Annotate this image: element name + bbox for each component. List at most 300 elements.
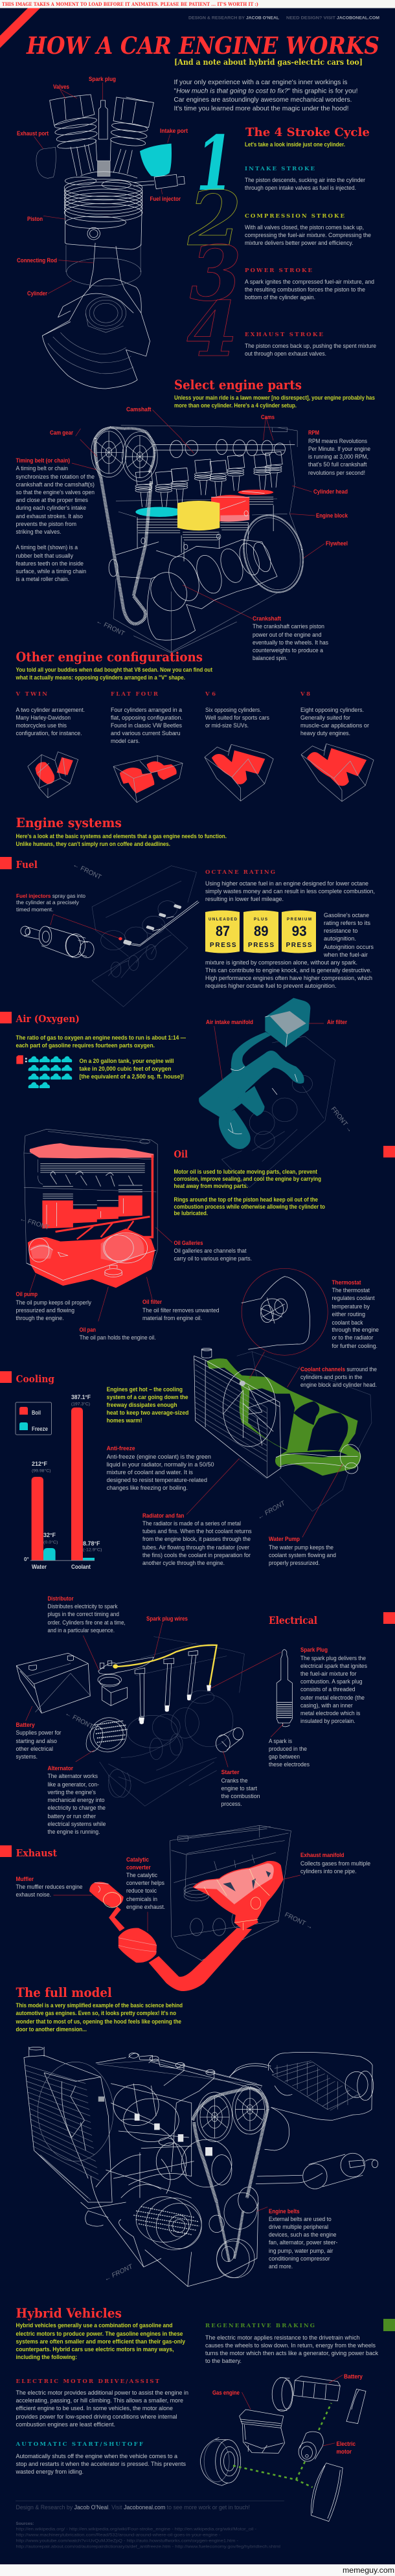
intake stroke: through open intake valves as fuel is injected. <box>245 185 356 192</box>
engine parts labels: Engine block <box>316 512 348 519</box>
hybrid labels: motor <box>337 2448 352 2456</box>
config: v twin: motorcycles use this <box>16 722 67 729</box>
oil fill: camshaft <box>30 1143 153 1158</box>
timing gears <box>91 427 157 481</box>
compression stroke: mixture delivers better power and efficiency. <box>245 240 354 247</box>
radiator fan <box>223 1369 276 1446</box>
radiator <box>24 2047 112 2202</box>
FRONT marker fuel: ← FRONT <box>72 861 102 881</box>
catalytic converter note: converter helps <box>126 1880 164 1887</box>
spark plug wires <box>135 1650 198 1721</box>
lead: oil: be lubricated. <box>174 1210 208 1217</box>
oil fill: pistons <box>42 1196 142 1229</box>
thermostat note: through the engine <box>332 1327 379 1334</box>
leader lines <box>26 1623 284 1767</box>
heading: fuel: Fuel <box>16 860 38 871</box>
spark plug blocks <box>98 2097 212 2156</box>
spark plug in diagram <box>96 100 111 176</box>
intro text: If your only experience with a car engine's inner workings is <box>174 78 347 86</box>
engine parts labels: Cam gear <box>50 429 73 437</box>
engine block outline <box>113 426 302 653</box>
electric motor drive/assist <box>16 2378 188 2428</box>
oxygen tank note: take in 20,000 cubic feet of oxygen <box>79 1066 172 1073</box>
air manifold labels: Air filter <box>327 1019 347 1026</box>
piston diagram labels: Piston <box>27 216 43 223</box>
lead: oil: heat away from moving parts. <box>174 1183 248 1190</box>
design credits: JACOB O'NEAL <box>246 16 279 21</box>
badge: 89 plus: 89 <box>254 923 268 939</box>
oil section tab <box>383 1146 395 1157</box>
intro text: Car engines are astoundingly awesome mechanical wonders. <box>174 96 352 104</box>
category labels <box>32 1394 100 1570</box>
icon: gas can <box>16 1055 23 1064</box>
stroke numeral 3: 3 <box>190 230 242 318</box>
water pump note: The water pump keeps the <box>269 1544 333 1551</box>
lead: hybrid: electric motors to produce power. The gasoline engines in these <box>16 2331 183 2338</box>
thermostat note: either routing <box>332 1311 365 1318</box>
highlighted spark plug wire <box>115 1645 217 1689</box>
starter note: engine to start <box>221 1785 257 1792</box>
cylinder, dome and piston rings <box>64 172 142 249</box>
leader lines <box>186 1352 343 1537</box>
alternator note: like a generator, con- <box>48 1781 99 1788</box>
distributor note: Distributor <box>48 1595 74 1602</box>
heading: air: Air (Oxygen) <box>16 1014 80 1025</box>
spark plug note: consists of a threaded <box>300 1686 356 1693</box>
dim back wire <box>237 1352 372 1511</box>
config: flat four: FLAT FOUR <box>111 691 159 698</box>
hybrid labels: Gas engine <box>212 2389 240 2397</box>
leader lines <box>72 439 324 619</box>
fuel injector <box>133 174 185 189</box>
FRONT marker full model: ← FRONT <box>103 2263 135 2283</box>
compression stroke <box>245 213 371 247</box>
regenerative braking <box>205 2323 378 2365</box>
config: v6: Six opposing cylinders. <box>205 707 262 714</box>
lead: one cylinder: Let's take a look inside just one cylinder. <box>245 141 345 148</box>
anti-freeze note: designed to resist temperature-related <box>107 1477 207 1484</box>
anti-freeze note: Anti-freeze (engine coolant) is the green <box>107 1453 211 1461</box>
thermostat note: regulates coolant <box>332 1295 375 1302</box>
piston diagram labels: Intake port <box>160 128 188 135</box>
config: v8: heavy duty engines. <box>300 730 350 737</box>
badge: 87 unleaded: PRESS <box>210 942 236 949</box>
oil wire overlay <box>27 1171 156 1281</box>
spark plug wires label: Spark plug wires <box>146 1615 188 1623</box>
FRONT marker air: FRONT → <box>330 1106 354 1134</box>
alternator and starter lower wire <box>100 1762 217 1806</box>
regenerative braking: turns the motor which then acts like a generator, giving power back <box>205 2350 378 2357</box>
lead: four cylinder setup <box>174 394 375 409</box>
radiator and fan note: tubes. Air flowing through the radiator (over <box>142 1544 249 1551</box>
alternator <box>84 1714 131 1755</box>
lead: cooling: system of a car going down the <box>107 1394 188 1401</box>
air manifold labels <box>206 1019 347 1026</box>
muffler <box>256 2153 378 2189</box>
spark plug note: outer metal electrode (the <box>300 1694 365 1702</box>
catalytic converter note: Catalytic <box>126 1856 149 1864</box>
catalytic converter note: reduce toxic <box>126 1887 157 1895</box>
leader lines <box>30 1227 172 1321</box>
radiator wire <box>194 1348 281 1478</box>
timing belt note: A timing belt (shown) is a <box>16 544 78 551</box>
dim engine wire <box>92 866 196 1007</box>
air filter box <box>229 2052 374 2150</box>
intro text: "How much is that going to cost to fix?" this graphic is for you! <box>174 87 357 95</box>
category labels: Coolant <box>71 1564 91 1570</box>
manifold wire highlights <box>228 1016 297 1134</box>
muffler <box>89 1882 124 1908</box>
lead: cooling: Engines get hot – the cooling <box>107 1386 183 1393</box>
starter note: Starter <box>221 1769 240 1776</box>
timing belt <box>95 439 151 624</box>
timing belt note: crankshaft and the camshaft(s) <box>16 481 95 488</box>
intro text <box>174 78 357 113</box>
oil galleries note <box>174 1240 252 1262</box>
exhaust manifold note <box>300 1852 370 1875</box>
lead: air ratio <box>16 1034 186 1049</box>
celsius values: (197.3°C) <box>71 1402 90 1407</box>
thermostat wire <box>242 1277 310 1349</box>
distributor note: order. Cylinders fire one at a time, <box>48 1619 126 1626</box>
intake stroke <box>245 166 365 192</box>
exhaust port <box>36 147 56 178</box>
footer credit: Design & Research by Jacob O'Neal. Visit Jacoboneal.com to see more work or get in touch! <box>16 2504 250 2511</box>
spark gap note: A spark is <box>269 1738 292 1745</box>
lead: four cylinder setup: more than one cylinder. Here's a 4 cylinder setup. <box>174 402 297 409</box>
lead: full model: automotive gas engines. Even so, it looks pretty complex! It's no <box>16 2010 176 2017</box>
axis <box>30 1560 95 1561</box>
config: flat four <box>111 691 183 803</box>
lead: air ratio: each part of gasoline requires fourteen parts oxygen. <box>16 1042 155 1049</box>
automatic start/shutoff: AUTOMATIC START/SHUTOFF <box>16 2441 143 2448</box>
FRONT marker exhaust: FRONT → <box>284 1911 314 1931</box>
radiator fan arc <box>38 2060 262 2161</box>
hybrid drivetrain diagram <box>200 2375 366 2522</box>
fuel injector note: the cylinder at a precisely <box>16 899 80 906</box>
exhaust manifold note: cylinders into one pipe. <box>300 1868 357 1875</box>
spark plug enlarged <box>276 1650 292 1727</box>
piston rings <box>137 497 273 540</box>
lead: full model: wonder that to most of us, opening the hood feels like opening the <box>16 2018 181 2025</box>
exhaust manifold note: Exhaust manifold <box>300 1852 344 1859</box>
fuel rail <box>131 901 199 946</box>
heading: engine systems: Engine systems <box>16 815 122 830</box>
intro text: It's time you learned more about the magic under the hood! <box>174 105 348 113</box>
engine wire outline <box>24 1129 157 1270</box>
alternator note: mechanical energy into <box>48 1797 105 1804</box>
badge: 87 unleaded: 87 <box>216 923 230 939</box>
starter note <box>221 1769 260 1808</box>
spark plug note: The spark plug delivers the <box>300 1655 366 1662</box>
manifold gaps <box>223 1871 271 1891</box>
oil filter note <box>142 1299 219 1322</box>
starter note: the combustion <box>221 1793 260 1800</box>
air section tab <box>0 1012 12 1023</box>
leader lines <box>242 2375 343 2446</box>
alternator note: battery or run other <box>48 1813 96 1820</box>
oxygen clouds <box>28 1056 72 1088</box>
lead: full model <box>16 2002 183 2033</box>
fuel injector note: Fuel injectors spray gas into <box>16 893 85 899</box>
full engine model diagram <box>24 2047 378 2286</box>
spark gap note: gap between <box>269 1753 300 1761</box>
category labels: Water <box>32 1564 47 1570</box>
config: flat four: model cars. <box>111 738 140 745</box>
exhaust manifold <box>193 1861 284 1930</box>
catalytic converter note: converter <box>126 1864 151 1871</box>
battery note: other electrical <box>16 1746 53 1753</box>
hybrid labels: Electric <box>337 2441 356 2448</box>
subtitle: [And a note about hybrid gas-electric cars too] <box>174 58 363 67</box>
octane rating <box>205 869 375 903</box>
radiator and fan note: the fins) cools the coolant in preparation for <box>142 1552 251 1559</box>
config: flat four: Four cylinders arranged in a <box>111 707 183 714</box>
regenerative braking: causes the wheels to slow down. In return, energy from the wheels <box>205 2342 376 2349</box>
battery note <box>16 1722 61 1761</box>
oil galleries note: Oil Galleries <box>174 1240 203 1247</box>
octane rating: simply wastes money and can result in less complete combustion, <box>205 888 375 895</box>
icon: gas can and oxygen clouds <box>16 1055 72 1088</box>
lower pulleys <box>238 2187 258 2213</box>
category labels: 387.1°F <box>71 1394 91 1400</box>
badge: 87 unleaded <box>205 911 240 953</box>
full model timing gears <box>197 2084 267 2142</box>
dense engine core <box>91 2084 232 2220</box>
FRONT marker electrical: ← FRONT <box>64 1710 94 1731</box>
radiator and fan note: from the engine block, it passes through the <box>142 1536 251 1543</box>
config: v6 <box>205 691 273 801</box>
piston diagram labels: Valves <box>53 84 69 91</box>
automatic start/shutoff: stop and restarts it when the accelerator is pressed. This prevents <box>16 2461 186 2468</box>
radiator and coolant diagram <box>186 1348 372 1537</box>
config: flat four: flat, opposing configuration. <box>111 714 183 722</box>
config: v twin: A two cylinder arrangement. <box>16 707 85 714</box>
power stroke: the resulting combustion forces the piston to the <box>245 286 365 293</box>
battery note: systems. <box>16 1753 38 1761</box>
heading: the full model: The full model <box>16 1985 112 2000</box>
alternator note <box>48 1765 106 1836</box>
intake stroke: The piston descends, sucking air into the cylinder <box>245 177 365 184</box>
fuel injector enlarged <box>21 926 94 958</box>
lead: cooling: homes warm! <box>107 1417 142 1424</box>
cams and valve stacks <box>135 439 295 507</box>
engine belts note: conditioning compressor <box>269 2255 330 2263</box>
timing belt note: during each cylinder's intake <box>16 505 86 512</box>
spark gap note <box>269 1738 310 1768</box>
engine parts labels: Cams <box>261 414 275 421</box>
bar: coolant boil <box>71 1408 83 1560</box>
fuel injector note <box>16 893 85 913</box>
catalytic converter <box>119 1928 157 1963</box>
full model timing belt <box>193 2088 267 2202</box>
badge: 89 plus: PRESS <box>248 942 274 949</box>
oxygen tank note: [the equivalent of a 2,500 sq. ft. house]! <box>79 1073 184 1080</box>
engine parts labels: Flywheel <box>326 540 348 547</box>
catalytic converter note: engine exhaust. <box>126 1904 165 1911</box>
engine parts labels: Camshaft <box>126 406 152 413</box>
crankshaft note: counterweights to produce a <box>253 647 324 654</box>
hybrid labels <box>212 2373 363 2456</box>
valve band <box>40 1164 145 1205</box>
badge: 93 premium: PRESS <box>286 942 312 949</box>
anti-freeze note: mixture of coolant and water. It is <box>107 1469 193 1476</box>
battery block <box>293 2376 340 2401</box>
lead: air ratio: The ratio of gas to oxygen an engine needs to run is about 1:14 — <box>16 1034 186 1042</box>
lead: hybrid: Hybrid vehicles generally use a combination of gasoline and <box>16 2322 173 2329</box>
power stroke: A spark ignites the compressed fuel-air mixture, and <box>245 279 374 286</box>
octane explanation: Autoignition occurs <box>324 944 374 951</box>
catalytic converter note: chemicals in <box>126 1896 157 1903</box>
muffler note: Muffler <box>16 1876 34 1883</box>
lead: configurations: You told all your buddies when dad bought that V8 sedan. Now you can find out <box>16 667 213 674</box>
green coolant channels <box>207 1358 361 1476</box>
distributor <box>98 1657 153 1705</box>
design credits <box>188 16 379 21</box>
fuel injector note: timed moment. <box>16 906 53 913</box>
badge: 93 premium <box>282 911 316 953</box>
oil pump note: pressurized and flowing <box>16 1307 74 1314</box>
timing belt note: prevents the piston from <box>16 521 76 528</box>
lead: hybrid: including the following: <box>16 2354 77 2361</box>
thermostat note: for further cooling. <box>332 1343 378 1350</box>
dim engine wire <box>221 1036 335 1187</box>
design credits: NEED DESIGN? VISIT <box>286 16 335 21</box>
timing belt note: rubber belt that usually <box>16 553 73 560</box>
sources <box>16 2522 281 2549</box>
timing belt note: Timing belt (or chain) <box>16 457 70 464</box>
green drive lines <box>233 2403 332 2487</box>
lead: oil: combustion process while otherwise allowing the cylinder to <box>174 1203 325 1211</box>
config: v6: V6 <box>205 691 216 698</box>
rpm note <box>308 429 370 477</box>
flywheel <box>237 511 310 597</box>
oil galleries note: Oil galleries are channels that <box>174 1248 247 1255</box>
footer rule <box>16 2500 284 2502</box>
distributor note: and in a particular sequence. <box>48 1627 115 1634</box>
sources: Sources: <box>16 2522 34 2526</box>
red piston and top <box>211 495 249 521</box>
heading: electrical: Electrical <box>269 1614 317 1626</box>
electric motor drive/assist: The electric motor provides additional power to assist the engine in <box>16 2389 188 2397</box>
teal manifold <box>199 998 310 1149</box>
power stroke: bottom of the cylinder again. <box>245 294 315 301</box>
starter note: Cranks the <box>221 1777 248 1784</box>
octane rating: OCTANE RATING <box>205 869 275 876</box>
red corner diagonal stripe <box>0 8 40 48</box>
timing belt note: A timing belt or chain <box>16 465 68 472</box>
oil filter note: The oil filter removes unwanted <box>142 1307 219 1314</box>
piston and cylinder diagram <box>34 82 185 389</box>
spark gap note: these electrodes <box>269 1761 310 1768</box>
cyan piston <box>135 507 183 517</box>
lead: configurations <box>16 667 213 681</box>
piston diagram labels: Exhaust port <box>17 130 49 137</box>
engine parts labels <box>50 406 348 547</box>
radiator and fan note: The radiator is made of a series of metal <box>142 1520 241 1527</box>
muffler note <box>16 1876 83 1898</box>
badge: 93 premium: 93 <box>292 923 307 939</box>
oil filter note: Oil filter <box>142 1299 162 1306</box>
config: flat four: and various current Subaru <box>111 730 181 737</box>
alternator note: electricity to charge the <box>48 1805 106 1812</box>
config: v twin: configuration, for instance. <box>16 730 82 737</box>
connecting rod and crank <box>42 243 150 389</box>
crankshaft note: Crankshaft <box>253 615 282 622</box>
top notice strip <box>0 0 395 8</box>
thermostat magnified circle <box>242 1268 328 1355</box>
manifold highlight <box>194 1864 274 1904</box>
valves and springs <box>50 95 153 176</box>
design credits: JACOBONEAL.COM <box>337 16 379 21</box>
oil pump note <box>16 1291 91 1322</box>
alternator note: Alternator <box>48 1765 73 1772</box>
radiator and fan note <box>142 1512 252 1567</box>
electrical section tab <box>383 1612 395 1624</box>
lower belt and crank pulley <box>217 2202 243 2262</box>
engine belts note: drive multiple peripheral <box>269 2224 328 2231</box>
cooling section tab <box>0 1371 12 1383</box>
exhaust stroke <box>245 332 376 358</box>
config: v twin <box>16 691 85 798</box>
manifold wire <box>204 1869 269 1930</box>
octane explanation: This can contribute to engine knock, and is generally destructive. <box>205 967 372 974</box>
category labels: 32°F <box>43 1532 56 1538</box>
config: v6: Well suited for sports cars <box>205 714 269 722</box>
four cylinder engine diagram <box>72 410 324 653</box>
octane rating: resulting in lower fuel mileage. <box>205 896 284 903</box>
lead: oil <box>174 1168 325 1217</box>
timing belt note <box>16 457 95 583</box>
engine belts note: and more. <box>269 2263 293 2270</box>
badge: 93 premium: PREMIUM <box>287 918 311 922</box>
heading: oil: Oil <box>174 1149 188 1160</box>
sources: http://en.wikipedia.org/ - http://en.wikipedia.org/wiki/Four-stroke_engine - http://en.wikipedia.org/wiki/Motor_oil - <box>16 2527 256 2531</box>
spark plug note: combustion. A spark plug <box>300 1678 363 1685</box>
crankshaft <box>109 540 277 640</box>
battery note: Supplies power for <box>16 1729 61 1737</box>
regenerative braking: REGENERATIVE BRAKING <box>205 2323 315 2329</box>
air filter <box>269 1011 306 1034</box>
rpm note: Per Minute. If your engine <box>308 446 370 453</box>
water pump note: properly pressurized. <box>269 1560 320 1567</box>
bar: water boil <box>32 1477 43 1560</box>
regenerative braking: to the battery. <box>205 2358 242 2365</box>
oil galleries note: carry oil to various engine parts. <box>174 1255 252 1262</box>
legend: boil and freeze: Freeze <box>32 1426 48 1432</box>
spark plug note: insulated by porcelain. <box>300 1718 356 1725</box>
lead: hybrid: systems are often smaller and more efficient than their gas-only <box>16 2338 186 2345</box>
water pump note: Water Pump <box>269 1536 300 1543</box>
lead: engine systems: Here's a look at the basic systems and elements that a gas engine needs to function. <box>16 833 227 840</box>
design credits: DESIGN & RESEARCH BY <box>188 16 245 21</box>
lead: oil: corrosion, improve sealing, and cool the engine by carrying <box>174 1176 321 1183</box>
anti-freeze note: changes like freezing or boiling. <box>107 1485 188 1492</box>
dim engine wire <box>108 1637 244 1783</box>
muffler note: exhaust noise. <box>16 1891 51 1898</box>
lead: oil: Rings around the top of the piston head keep oil out of the <box>174 1196 318 1203</box>
spark plug note: Spark Plug <box>300 1647 328 1654</box>
anti-freeze note <box>107 1445 214 1492</box>
sources: http://autorepair.about.com/od/autorepairdictionary/a/def_antifreeze.htm - http://www.fueleconomy.gov/feg/hybridtech.shtml <box>16 2544 281 2549</box>
alternator note: The alternator works <box>48 1773 98 1780</box>
battery <box>16 1653 90 1713</box>
anti-freeze note: Anti-freeze <box>107 1445 135 1452</box>
top notice strip: THIS IMAGE TAKES A MOMENT TO LOAD BEFORE IT ANIMATES. PLEASE BE PATIENT ... IT'S WORTH IT :) <box>2 1 258 7</box>
octane explanation: High performance engines often have higher compression, which <box>205 975 372 982</box>
octane explanation: requires higher octane fuel to prevent autoignition. <box>205 983 337 990</box>
axis zero: 0° <box>24 1556 29 1562</box>
